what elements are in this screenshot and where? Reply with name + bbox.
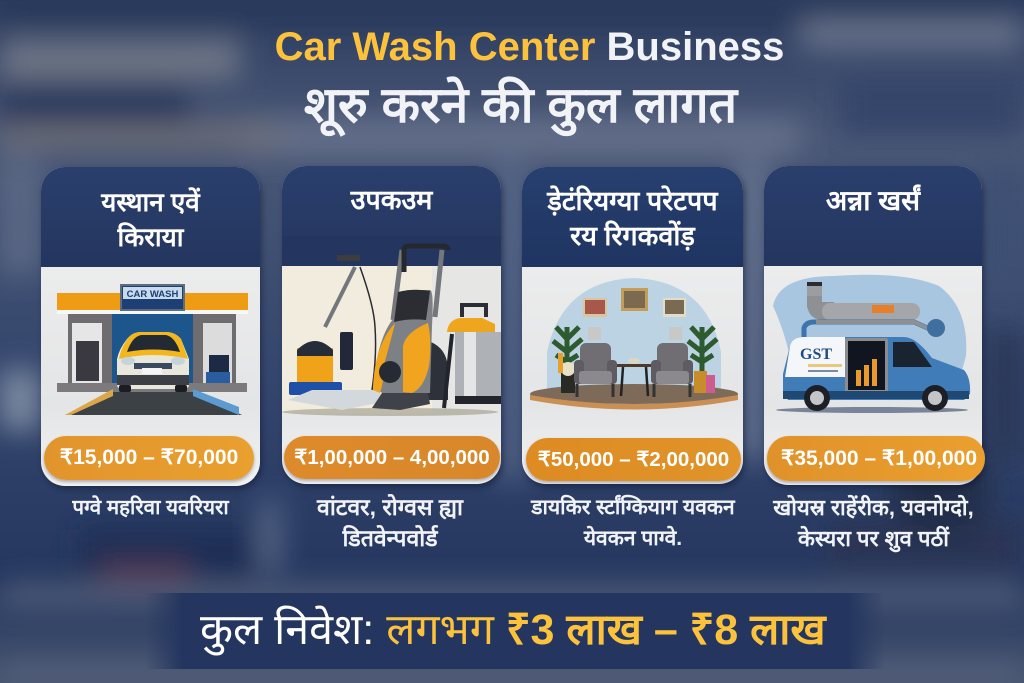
panel card <box>522 167 743 484</box>
panel heading: उपकउम <box>351 185 432 215</box>
note text <box>316 494 464 551</box>
price pill: ₹35,000 – ₹1,00,000 <box>781 447 977 470</box>
icon: pressure washer and vacuum <box>282 244 501 416</box>
panel heading <box>282 166 501 266</box>
price pill: ₹1,00,000 – 4,00,000 <box>294 446 490 469</box>
icon: car wash building: CAR WASH <box>127 289 178 300</box>
note text: वांटवर, रोग्वस ह्या <box>317 494 463 520</box>
panel heading: किराया <box>118 222 183 252</box>
icon: GST service van: GST <box>800 346 832 363</box>
title line: English: Car Wash Center Business <box>275 25 784 69</box>
panel: other expenses <box>764 166 986 552</box>
panel: interiors <box>522 167 748 550</box>
panel card <box>282 166 501 484</box>
panel card <box>41 167 260 486</box>
price pill <box>767 436 985 481</box>
panel card <box>764 166 982 485</box>
icon: GST service van <box>773 274 970 413</box>
price pill <box>284 436 500 479</box>
panel heading <box>522 167 743 267</box>
icon: car wash building <box>57 284 248 415</box>
panel: equipment <box>282 166 506 551</box>
note text <box>530 494 736 550</box>
note text: डितवेन्पवोर्ड <box>342 525 438 551</box>
note text: पग्वे महरिवा यवरियरा <box>72 496 229 519</box>
banner text: कुल निवेश: लगभग ₹3 लाख – ₹8 लाख <box>200 606 826 654</box>
note text <box>772 494 974 552</box>
note text: येवकन पाग्वे. <box>584 527 682 550</box>
icon: lounge with chairs <box>530 278 738 410</box>
title <box>275 25 784 137</box>
panel heading <box>41 167 260 267</box>
price pill <box>44 436 254 480</box>
price pill: ₹50,000 – ₹2,00,000 <box>538 448 729 471</box>
price pill <box>526 438 741 481</box>
panel heading: रय रिगकवोंड़ <box>570 221 695 251</box>
title line: Hindi: शूरु करने की कुल लागत <box>304 77 737 133</box>
note text: डायकिर र्स्टांग्कियाग यवकन <box>531 496 735 519</box>
panel heading: अन्ना खर्सं <box>826 185 920 216</box>
note text: केस्यरा पर शुव पठीं <box>798 526 949 551</box>
panel heading: यस्थान एवें <box>101 187 200 217</box>
total investment banner <box>145 593 885 669</box>
price pill: ₹15,000 – ₹70,000 <box>60 446 238 469</box>
panel heading <box>764 166 982 266</box>
panel: location and rent <box>40 167 264 519</box>
note text: खोयस्र राहेंरीक, यवनोग्दो, <box>773 495 974 520</box>
panel heading: ड़ेटंरियग्या परेटपप <box>547 186 718 216</box>
